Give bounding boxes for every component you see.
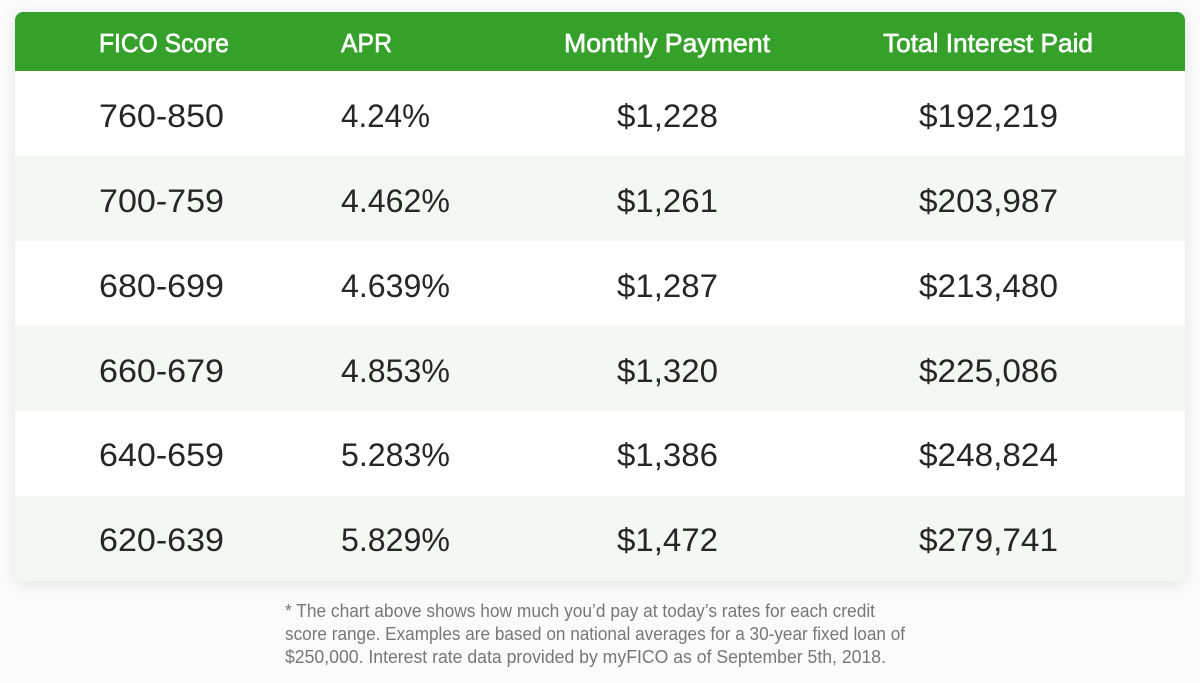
- header labels: Total Interest Paid: [883, 28, 1093, 58]
- row: 640-659: $1,386: [617, 437, 718, 473]
- row: 760-850: 760-850: [99, 98, 224, 134]
- row: 620-639: $1,472: [617, 522, 718, 558]
- row: 620-639: 620-639: [99, 522, 224, 558]
- footnote: [285, 601, 906, 667]
- footnote: * The chart above shows how much you’d pay at today’s rates for each credit: [285, 601, 875, 621]
- row 6 background: [15, 496, 1185, 581]
- row: 660-679: $225,086: [919, 353, 1058, 389]
- footnote: $250,000. Interest rate data provided by myFICO as of September 5th, 2018.: [285, 647, 886, 667]
- row: 760-850: $1,228: [617, 98, 718, 134]
- row: 760-850: $192,219: [919, 98, 1058, 134]
- row: 660-679: $1,320: [617, 353, 718, 389]
- row: 620-639: $279,741: [919, 522, 1058, 558]
- row: 640-659: [99, 437, 1058, 473]
- row: 680-699: $213,480: [919, 268, 1058, 304]
- row: 700-759: [99, 183, 1058, 219]
- row: 700-759: $1,261: [617, 183, 718, 219]
- row: 680-699: [99, 268, 1058, 304]
- row: 680-699: 4.639%: [341, 268, 450, 304]
- row: 700-759: $203,987: [919, 183, 1058, 219]
- row: 760-850: [99, 98, 1058, 134]
- row: 640-659: 640-659: [99, 437, 224, 473]
- row: 640-659: 5.283%: [341, 437, 450, 473]
- row: 620-639: [99, 522, 1058, 558]
- header bar: [15, 12, 1185, 71]
- row: 660-679: 660-679: [99, 353, 224, 389]
- row: 640-659: $248,824: [919, 437, 1058, 473]
- header labels: Monthly Payment: [564, 28, 771, 58]
- row: 700-759: 4.462%: [341, 183, 450, 219]
- header labels: APR: [341, 28, 392, 58]
- row: 680-699: 680-699: [99, 268, 224, 304]
- row 2 background: [15, 156, 1185, 241]
- row: 660-679: [99, 353, 1058, 389]
- row 4 background: [15, 326, 1185, 411]
- footnote: score range. Examples are based on national averages for a 30-year fixed loan of: [285, 624, 906, 644]
- row: 680-699: $1,287: [617, 268, 718, 304]
- header labels: [99, 28, 1093, 58]
- row: 620-639: 5.829%: [341, 522, 450, 558]
- row: 660-679: 4.853%: [341, 353, 450, 389]
- row: 700-759: 700-759: [99, 183, 224, 219]
- header labels: FICO Score: [99, 28, 229, 58]
- row: 760-850: 4.24%: [341, 98, 430, 134]
